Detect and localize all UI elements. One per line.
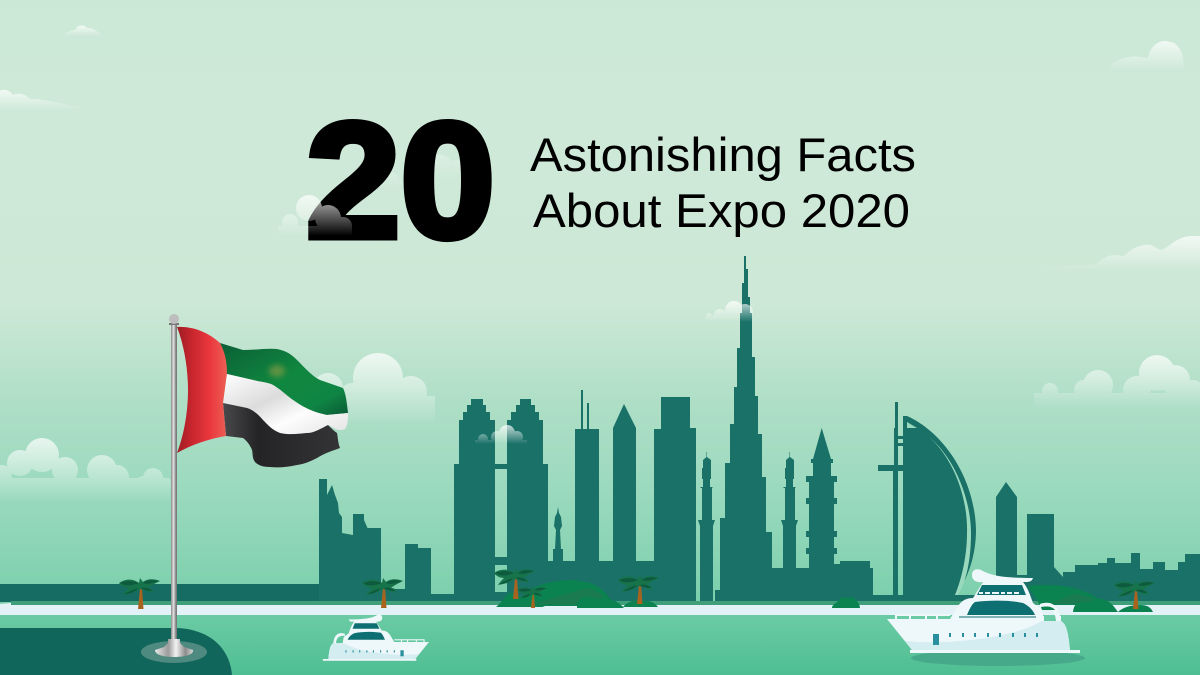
UAE flag xyxy=(177,327,348,467)
pole cap xyxy=(169,323,179,325)
yacht hull shade xyxy=(905,621,1070,650)
flag black stripe xyxy=(223,403,340,467)
yacht window strip xyxy=(979,592,1019,594)
flag pole xyxy=(141,314,207,663)
pole shaft xyxy=(171,322,177,642)
title text: Astonishing Facts xyxy=(530,128,916,181)
title text: About Expo 2020 xyxy=(533,184,910,237)
small minaret xyxy=(553,507,563,562)
right rungs xyxy=(898,436,903,446)
palm tree 1 xyxy=(119,578,160,609)
sail crescent highlight xyxy=(907,422,971,595)
base halo xyxy=(141,641,207,663)
right towers xyxy=(996,482,1200,602)
title number 20: 20 xyxy=(306,89,495,272)
yacht rail xyxy=(895,615,1060,622)
tall office towers xyxy=(575,390,599,565)
yacht portholes xyxy=(949,633,1038,637)
pole stand xyxy=(155,639,193,657)
sea xyxy=(0,615,1200,675)
green bushes xyxy=(496,580,1153,612)
pole ball xyxy=(169,314,179,324)
Dubai skyline silhouette xyxy=(0,256,1200,602)
flag green highlight xyxy=(269,365,285,377)
base band xyxy=(0,584,319,602)
palm tree 6 xyxy=(1114,580,1155,609)
yacht shadow xyxy=(911,650,1085,666)
minaret left xyxy=(698,452,715,602)
palm tree 3 xyxy=(494,568,535,599)
clouds in the background xyxy=(0,26,1200,502)
yacht rear opening xyxy=(1041,606,1055,610)
yacht windows xyxy=(967,585,1035,615)
palm tree 4 xyxy=(517,586,547,608)
yacht large xyxy=(887,569,1085,666)
flag green stripe xyxy=(220,343,348,415)
palm tree 5 xyxy=(618,575,659,604)
foreground land xyxy=(0,628,232,675)
ivory tower xyxy=(806,428,837,570)
cloud over the number xyxy=(278,195,352,236)
shore strips xyxy=(0,601,1200,615)
title text xyxy=(530,128,916,237)
flag white stripe xyxy=(223,374,348,434)
yacht door xyxy=(933,634,939,645)
palm tree 2 xyxy=(362,578,403,608)
clouds near buildings xyxy=(475,301,753,444)
yacht small xyxy=(323,615,429,661)
yacht deck line xyxy=(959,616,1036,618)
minaret right xyxy=(781,452,798,570)
Burj Al Arab sail hotel xyxy=(878,402,1000,602)
left tower cluster xyxy=(319,479,454,602)
flag red stripe xyxy=(177,327,227,453)
yacht rear arch xyxy=(1040,603,1061,622)
Burj Khalifa xyxy=(715,256,895,602)
twin towers xyxy=(454,399,654,602)
yacht hull and cabin xyxy=(887,569,1080,653)
